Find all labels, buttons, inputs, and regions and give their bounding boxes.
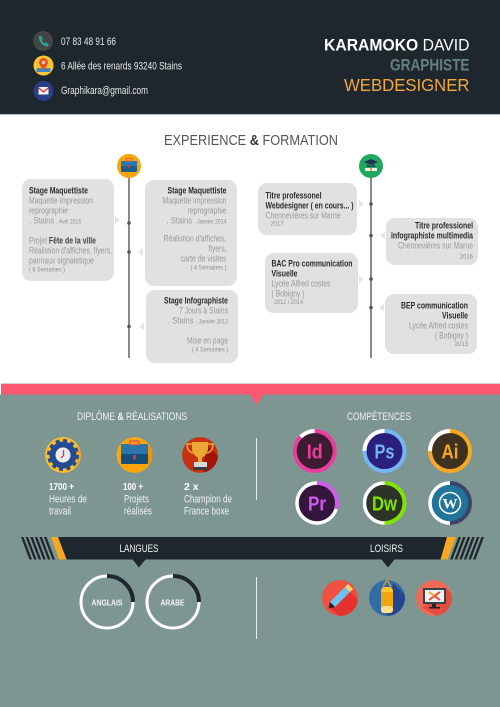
stat: 1700 heures: Heures de xyxy=(49,494,87,506)
card: titre webdesigner xyxy=(258,183,364,235)
card: stage maquettiste 2016: Projet Fête de la ville xyxy=(29,236,96,246)
skill: wordpress xyxy=(430,483,470,523)
stat: 1700 heures: 1700 + xyxy=(49,481,74,493)
stat: champion: France boxe xyxy=(184,506,229,518)
language: arabe: ARABE xyxy=(160,598,185,608)
card: titre webdesigner: Titre professonel xyxy=(266,190,322,200)
skill: illustrator: Ai xyxy=(442,442,458,464)
card: bac pro: BAC Pro communication xyxy=(272,258,352,268)
card: bac pro xyxy=(265,253,364,313)
icon: phone xyxy=(33,31,53,51)
card: stage maquettiste 2016: Maquette impression xyxy=(29,196,93,206)
skill: illustrator xyxy=(430,431,470,471)
language: anglais: ANGLAIS xyxy=(92,598,123,608)
card: titre infographiste: Titre professionel xyxy=(415,220,473,230)
stat: 100 projets: 100 + xyxy=(123,481,143,493)
card: stage infographiste xyxy=(139,290,238,363)
card: stage maquettiste 2014 xyxy=(138,180,237,286)
card: bep: BEP communication xyxy=(401,300,468,310)
card: stage infographiste: ( 4 Semaines ) xyxy=(192,348,228,354)
card: stage maquettiste 2016: . Stains . Avril 2016 xyxy=(29,216,82,226)
name: KARAMOKO DAVID xyxy=(324,36,470,54)
stat: champion: 2 x xyxy=(184,481,199,493)
skill: indesign xyxy=(295,431,335,471)
job title: webdesigner: WEBDESIGNER xyxy=(344,75,470,95)
header band xyxy=(0,0,500,115)
card: bep: 2013 xyxy=(455,342,469,348)
skill: wordpress: W xyxy=(442,496,458,512)
card: stage maquettiste 2014: . Stains . Janvier 2014 xyxy=(166,216,227,226)
card: bac pro: Lycée Alfred costes xyxy=(272,278,331,288)
card: stage maquettiste 2014: reprographie xyxy=(188,206,226,216)
contact: email: Graphikara@gmail.com xyxy=(61,85,148,97)
icon: briefcase xyxy=(116,437,152,473)
card: stage maquettiste 2014: carte de visites xyxy=(180,254,227,264)
timeline: formation xyxy=(359,154,383,358)
stat: 100 projets xyxy=(123,481,152,518)
card: bep: Visuelle xyxy=(442,310,468,320)
stat: 1700 heures xyxy=(49,481,87,518)
skill: indesign: Id xyxy=(307,442,323,464)
contact: address: 6 Allée des renards 93240 Stains xyxy=(61,60,182,72)
card: stage maquettiste 2014: Stage Maquettiste xyxy=(168,186,226,196)
card: titre webdesigner: . 2017 xyxy=(267,222,284,228)
skill: dreamweaver: Dw xyxy=(372,494,397,516)
card: stage maquettiste 2014: Réalistion d'affiches, xyxy=(164,234,226,244)
icon: clock gear xyxy=(45,437,81,473)
card: stage infographiste: 7 Jours à Stains xyxy=(179,306,228,316)
card: stage maquettiste 2016: pannaux signaletique xyxy=(29,256,94,266)
card: titre webdesigner: Webdesigner ( en cours... ) xyxy=(266,200,354,210)
card: bac pro: ( Bobigny ) xyxy=(272,288,304,298)
heading: loisirs: LOISIRS xyxy=(370,543,403,555)
icon: briefcase xyxy=(117,154,141,178)
card: titre infographiste: Chennevières sur Marne xyxy=(398,240,473,250)
skill: premiere: Pr xyxy=(308,494,326,516)
icon: mail xyxy=(34,81,54,101)
skill: dreamweaver xyxy=(364,483,404,523)
skill: premiere xyxy=(297,483,337,523)
heading: diplome et realisations: DIPLÔME & RÉALISATIONS xyxy=(77,410,187,423)
card: bep: ( Bobigny ) xyxy=(435,330,468,340)
icon: map pin xyxy=(34,56,54,76)
job title: graphiste: GRAPHISTE xyxy=(390,56,470,74)
card: titre infographiste: infographiste multimedia xyxy=(391,230,474,240)
card: stage infographiste: Stage Infographiste xyxy=(164,296,228,306)
card: stage maquettiste 2016 xyxy=(22,179,120,281)
banner: langues and loisirs xyxy=(21,537,484,568)
stat: champion: Champion de xyxy=(184,494,232,506)
heading: langues: LANGUES xyxy=(120,543,158,555)
heading: competences: COMPÉTENCES xyxy=(347,410,411,423)
stat: 100 projets: réalisés xyxy=(124,506,152,518)
skill: photoshop: Ps xyxy=(374,442,394,464)
card: stage maquettiste 2016: ( 8 Semaines ) xyxy=(29,268,65,274)
card: bac pro: 2012 / 2014 xyxy=(274,300,304,306)
icon: trophy xyxy=(182,437,218,473)
card: stage maquettiste 2014: ( 4 Semaines ) xyxy=(190,266,227,272)
card: bep: Lycée Alfred costes xyxy=(409,320,468,330)
language: anglais xyxy=(81,576,133,628)
bottom panel background xyxy=(0,383,500,707)
stat: 1700 heures: travail xyxy=(49,506,71,518)
card: stage maquettiste 2016: Stage Maquettiste xyxy=(29,186,88,196)
card: stage maquettiste 2016: Réalistion d'affiches, flyers, xyxy=(29,246,112,256)
stat: champion xyxy=(184,481,232,518)
card: titre webdesigner: Chennevières sur Marne xyxy=(266,210,340,220)
card: bac pro: Visuelle xyxy=(272,268,298,278)
language: arabe xyxy=(147,576,199,628)
stat: 100 projets: Projets xyxy=(124,494,149,506)
icon: punching bag xyxy=(369,580,405,616)
card: titre infographiste xyxy=(380,218,478,265)
card: stage infographiste: Mise en page xyxy=(187,336,228,346)
contact: phone: 07 83 48 91 66 xyxy=(61,36,116,48)
heading: experience and formation: EXPERIENCE & FORMATION xyxy=(164,132,338,149)
card: titre infographiste: 2016 xyxy=(460,254,474,260)
card: stage maquettiste 2014: flyers, xyxy=(208,244,226,254)
timeline: experience xyxy=(117,154,141,358)
card: bep xyxy=(379,294,477,354)
icon: graduation cap xyxy=(359,154,383,178)
icon: pencil xyxy=(322,580,358,616)
card: stage maquettiste 2016: reprographie xyxy=(29,206,68,216)
card: stage maquettiste 2014: Maquette impression xyxy=(162,196,226,206)
icon: design monitor xyxy=(416,580,452,616)
card: stage infographiste: . Stains . Janvier 2013 xyxy=(168,316,229,326)
skill: photoshop xyxy=(364,431,404,471)
